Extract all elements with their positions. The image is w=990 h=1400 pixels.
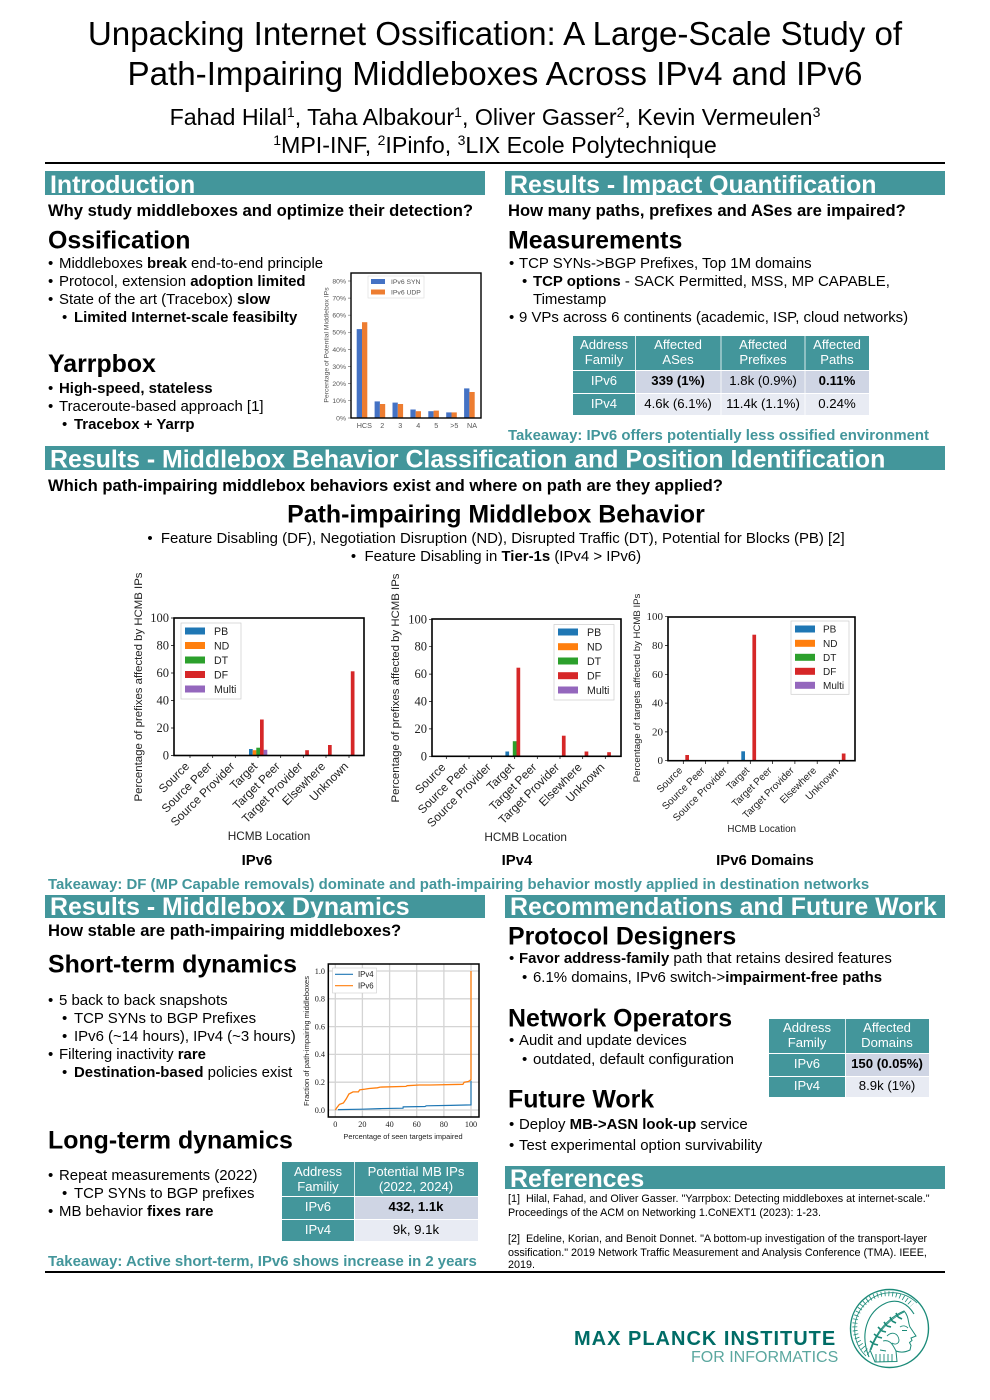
table: impact: IPv6 (591, 373, 617, 388)
bar chart: potential middlebox IPs by hop: NA (467, 421, 477, 430)
chart: IPv6 prefixes by HCMB location: 60 (156, 666, 169, 680)
line chart: fraction of middleboxes vs targets impaired: 100 (465, 1120, 477, 1129)
bullet list: short-term: rare (178, 1046, 206, 1063)
line chart: fraction of middleboxes vs targets impaired (302, 964, 479, 1141)
chart: IPv6 domains by HCMB location: 80 (652, 640, 664, 652)
bullet list: short-term: policies exist (208, 1064, 292, 1081)
title (88, 16, 903, 93)
table: long-term (282, 1162, 478, 1241)
bar chart: potential middlebox IPs by hop: HCS (357, 421, 372, 430)
bar chart: potential middlebox IPs by hop: IPv6 UDP (391, 290, 421, 296)
chart: IPv4 prefixes by HCMB location: Source Provider (424, 760, 494, 830)
bullet list: protocol designers (509, 950, 892, 986)
chart: IPv6 prefixes by HCMB location (133, 572, 364, 843)
bullet list: future work: MB->ASN look-up service (570, 1116, 748, 1133)
logo: Max Planck Institute for Informatics (574, 1290, 928, 1368)
panel: impact quantification (505, 171, 945, 444)
bar chart: potential middlebox IPs by hop: Percentage of Potential Middlebox IPs (324, 287, 330, 403)
chart: IPv6 prefixes by HCMB location: 40 (156, 694, 169, 708)
bullet list: yarrpbox: • (48, 380, 53, 397)
chart: IPv6 prefixes by HCMB location: Unknown (306, 759, 351, 804)
bullet list: yarrpbox: High-speed, stateless (59, 380, 213, 397)
chart: IPv6 domains by HCMB location: 100 (646, 611, 664, 623)
heading: results impact quantification: Results - Impact Quantification (510, 171, 876, 199)
title: Unpacking Internet Ossification: A Large-Scale Study of (88, 16, 903, 53)
table: long-term: Familiy (297, 1179, 339, 1194)
line chart: fraction of middleboxes vs targets impaired: 0.6 (315, 1022, 325, 1031)
bar chart: potential middlebox IPs by hop: 30% (332, 364, 346, 371)
bullet list: ossification (48, 255, 323, 326)
table: operators: IPv4 (794, 1078, 820, 1093)
subheading: network operators: Network Operators (508, 1004, 732, 1032)
icon: Minerva head seal (850, 1290, 928, 1368)
references list: Proceedings of the ACM on Networking 1.CoNEXT1 (2023): 1-23. (508, 1207, 821, 1219)
bullet list: measurements: Timestamp (533, 291, 606, 308)
line chart: fraction of middleboxes vs targets impaired: 60 (413, 1120, 421, 1129)
panel: behavior classification (45, 446, 945, 893)
bullet list: measurements: TCP SYNs->BGP Prefixes, Top 1M domains (519, 255, 812, 272)
line chart: fraction of middleboxes vs targets impaired: Percentage of seen targets impaired (343, 1132, 463, 1141)
authors and affiliations: IPinfo, (385, 132, 458, 158)
table: impact: 11.4k (1.1%) (726, 396, 800, 411)
chart: IPv4 prefixes by HCMB location: HCMB Location (484, 830, 567, 844)
table: long-term: IPv6 (305, 1199, 331, 1214)
chart: IPv6 domains by HCMB location (632, 594, 855, 835)
chart: IPv6 domains by HCMB location: Target Peer (730, 765, 775, 810)
line chart: fraction of middleboxes vs targets impaired: 0.8 (315, 995, 325, 1004)
chart: IPv6 prefixes by HCMB location: 100 (150, 611, 169, 625)
bar chart: potential middlebox IPs by hop: IPv6 SYN (391, 279, 421, 286)
chart: IPv6 domains by HCMB location: 0 (658, 755, 664, 767)
table: long-term: Address (294, 1164, 342, 1179)
bullet list: ossification: Limited Internet-scale feasibilty (74, 309, 298, 326)
bullet list: measurements: • (509, 255, 514, 272)
authors and affiliations: 1 (454, 104, 462, 120)
line chart: fraction of middleboxes vs targets impaired: IPv4 (358, 970, 374, 979)
chart: IPv6 domains by HCMB location: DF (823, 667, 836, 678)
question: how stable: How stable are path-impairing middleboxes? (48, 921, 401, 940)
question: how many paths: How many paths, prefixes and ASes are impaired? (508, 201, 906, 220)
chart: IPv6 domains by HCMB location: Source Provider (671, 765, 730, 824)
bullet list: yarrpbox: • (48, 398, 53, 415)
chart: IPv6 domains by HCMB location: Percentage of targets affected by HCMB IPs (632, 594, 643, 782)
bullet list: protocol designers: impairment-free paths (725, 969, 882, 986)
chart: IPv4 prefixes by HCMB location: Target Peer (486, 760, 539, 813)
bullet list: ossification: Protocol, extension (59, 273, 190, 290)
chart: IPv4 prefixes by HCMB location: 20 (414, 722, 427, 736)
table: long-term: (2022, 2024) (379, 1179, 453, 1194)
chart: IPv6 prefixes by HCMB location: Elsewhere (279, 759, 328, 808)
bullet list: long-term (48, 1167, 257, 1220)
chart: IPv4 prefixes by HCMB location: 0 (421, 749, 427, 763)
line chart: fraction of middleboxes vs targets impaired: 0.4 (315, 1050, 325, 1059)
bullet list: short-term: • (48, 1046, 53, 1063)
table: impact: 0.24% (818, 396, 856, 411)
line chart: fraction of middleboxes vs targets impaired: 0.2 (315, 1078, 325, 1087)
chart: IPv4 prefixes by HCMB location: Source Peer (415, 760, 471, 816)
chart: IPv6 domains by HCMB location: Unknown (804, 765, 841, 803)
bullet list: future work (509, 1116, 763, 1154)
bullet list: protocol designers: 6.1% domains, IPv6 switch-> (533, 969, 725, 986)
bullet list: ossification: adoption limited (190, 273, 306, 290)
chart captions: IPv4 (502, 853, 533, 869)
heading: middlebox dynamics: Results - Middlebox Dynamics (50, 893, 410, 921)
bar chart: potential middlebox IPs by hop: 80% (332, 278, 346, 285)
chart: IPv6 domains by HCMB location: 60 (652, 669, 664, 681)
chart: IPv4 prefixes by HCMB location: Unknown (563, 760, 607, 805)
line chart: fraction of middleboxes vs targets impaired: 40 (386, 1120, 394, 1129)
authors and affiliations: 3 (813, 104, 821, 120)
bullet list: short-term: Destination-based (74, 1064, 203, 1081)
bullet list: measurements (509, 255, 908, 326)
line chart: fraction of middleboxes vs targets impaired: 80 (440, 1120, 448, 1129)
chart captions: IPv6 Domains (716, 853, 814, 869)
chart: IPv4 prefixes by HCMB location: 100 (408, 612, 427, 626)
bullet list: ossification: • (48, 273, 53, 290)
bullet list: short-term: • (62, 1010, 67, 1027)
bar chart: potential middlebox IPs by hop: 50% (332, 330, 346, 337)
chart: IPv4 prefixes by HCMB location: PB (587, 627, 601, 639)
table: operators: 150 (0.05%) (851, 1056, 923, 1071)
subheading: ossification: Ossification (48, 226, 190, 254)
bar chart: potential middlebox IPs by hop: 40% (332, 347, 346, 354)
chart: IPv6 prefixes by HCMB location: PB (214, 626, 228, 638)
bullet list: future work: Deploy (519, 1116, 570, 1133)
bullet list: yarrpbox: • (62, 416, 67, 433)
table: impact (573, 336, 869, 415)
chart: IPv6 prefixes by HCMB location: 20 (156, 721, 169, 735)
authors and affiliations: 2 (378, 132, 386, 148)
chart: IPv6 domains by HCMB location: Multi (823, 681, 844, 692)
bullet list: protocol designers: Favor address-family (519, 950, 670, 967)
bullet list: short-term: • (48, 992, 53, 1009)
heading: recommendations: Recommendations and Future Work (510, 893, 937, 921)
table: impact: Family (585, 352, 624, 367)
subheading: long-term: Long-term dynamics (48, 1126, 293, 1154)
bullet list: ossification: • (48, 255, 53, 272)
logo: Max Planck Institute for Informatics: FOR INFORMATICS (691, 1349, 838, 1366)
bar chart: potential middlebox IPs by hop: >5 (450, 421, 458, 430)
chart: IPv4 prefixes by HCMB location: Source (412, 760, 449, 797)
table: impact: Affected (739, 337, 787, 352)
bullet list: long-term: TCP SYNs to BGP prefixes (74, 1185, 254, 1202)
table: impact: Paths (820, 352, 854, 367)
logo: Max Planck Institute for Informatics: MAX PLANCK INSTITUTE (574, 1328, 836, 1350)
bar chart: potential middlebox IPs by hop: 3 (398, 421, 402, 430)
chart: IPv4 prefixes by HCMB location: DF (587, 671, 602, 683)
subheading: behavior: Path-impairing Middlebox Behavior (287, 500, 705, 528)
chart: IPv4 prefixes by HCMB location: Target Provider (496, 760, 562, 827)
bullet list: behavior (147, 530, 845, 565)
line chart: fraction of middleboxes vs targets impaired: IPv6 (358, 982, 374, 990)
table: impact: 4.6k (6.1%) (644, 396, 712, 411)
chart: IPv6 domains by HCMB location: Elsewhere (778, 765, 819, 806)
line chart: fraction of middleboxes vs targets impaired: 0.0 (315, 1106, 325, 1115)
bullet list: short-term: 5 back to back snapshots (59, 992, 228, 1009)
table: impact: ASes (662, 352, 694, 367)
chart: IPv6 domains by HCMB location: 40 (652, 698, 664, 710)
chart: IPv6 domains by HCMB location: 20 (652, 726, 664, 738)
bullet list: future work: • (509, 1116, 514, 1133)
takeaway: impact: Takeaway: IPv6 offers potentially less ossified environment (508, 427, 929, 444)
chart: IPv4 prefixes by HCMB location: Elsewhere (536, 760, 585, 809)
table: impact: 0.11% (819, 373, 856, 388)
chart: IPv6 prefixes by HCMB location: Source Provider (168, 759, 237, 829)
chart: IPv6 prefixes by HCMB location: Source (156, 759, 192, 796)
line chart: fraction of middleboxes vs targets impaired: Fraction of path-impairing middleboxes (302, 976, 311, 1106)
bullet list: short-term: • (62, 1028, 67, 1045)
table: operators: Family (788, 1035, 827, 1050)
chart: IPv6 prefixes by HCMB location: 0 (163, 748, 169, 762)
bullet list: ossification: • (62, 309, 67, 326)
bullet list: network operators: Audit and update devices (519, 1032, 687, 1049)
chart: IPv6 domains by HCMB location: Source (655, 765, 685, 796)
chart: IPv6 prefixes by HCMB location: Target (227, 759, 261, 792)
bullet list: short-term: Filtering inactivity (59, 1046, 178, 1063)
bullet list: ossification: State of the art (Tracebox) (59, 291, 237, 308)
chart: IPv6 domains by HCMB location: Target (725, 765, 752, 793)
chart: IPv6 domains by HCMB location: PB (823, 624, 837, 636)
panel: middlebox dynamics (45, 893, 485, 1270)
references list (508, 1193, 930, 1271)
takeaway: behavior: Takeaway: DF (MP Capable removals) dominate and path-impairing behavior mostly applied in destination networks (48, 876, 869, 893)
bullet list: short-term: • (62, 1064, 67, 1081)
table: impact: Address (580, 337, 628, 352)
chart: IPv6 prefixes by HCMB location: HCMB Location (228, 829, 310, 843)
bullet list: yarrpbox (48, 380, 264, 433)
chart: IPv4 prefixes by HCMB location: Multi (587, 685, 609, 697)
panel: recommendations and future work (505, 893, 945, 1271)
bullet list: protocol designers: • (509, 950, 514, 967)
bullet list: measurements: • (522, 273, 527, 290)
table: long-term: IPv4 (305, 1222, 331, 1237)
table: operators: 8.9k (1%) (859, 1078, 915, 1093)
chart: IPv4 prefixes by HCMB location: ND (587, 642, 603, 654)
bar chart: potential middlebox IPs by hop: 60% (332, 313, 346, 320)
chart: IPv6 prefixes by HCMB location: DF (214, 670, 229, 682)
bullet list: long-term: • (62, 1185, 67, 1202)
subheading: short-term: Short-term dynamics (48, 950, 297, 978)
bar chart: potential middlebox IPs by hop: 2 (380, 421, 384, 430)
bullet list: behavior: • Feature Disabling in Tier-1s (IPv4 > IPv6) (351, 548, 641, 565)
chart: IPv6 prefixes by HCMB location: Multi (214, 684, 236, 696)
authors and affiliations: MPI-INF, (281, 132, 378, 158)
table: long-term: 9k, 9.1k (393, 1222, 439, 1237)
bullet list: short-term: TCP SYNs to BGP Prefixes (74, 1010, 256, 1027)
chart: IPv4 prefixes by HCMB location: 60 (414, 667, 427, 681)
bullet list: measurements: 9 VPs across 6 continents (academic, ISP, cloud networks) (519, 309, 908, 326)
chart: IPv6 prefixes by HCMB location: Source Peer (159, 759, 215, 815)
chart: IPv4 prefixes by HCMB location: Percentage of prefixes affected by HCMB IPs (390, 573, 402, 802)
bullet list: measurements: • (509, 309, 514, 326)
chart: IPv6 prefixes by HCMB location: Percentage of prefixes affected by HCMB IPs (133, 572, 145, 801)
bullet list: ossification: Middleboxes (59, 255, 147, 272)
bullet list: protocol designers: path that retains desired features (673, 950, 892, 967)
chart: IPv6 domains by HCMB location: Target Provider (741, 765, 797, 821)
heading: behavior classification: Results - Middlebox Behavior Classification and Position Identification (50, 446, 885, 474)
table: operators: Domains (861, 1035, 913, 1050)
bullet list: network operators: • (522, 1051, 527, 1068)
bar chart: potential middlebox IPs by hop (324, 273, 481, 430)
references list: ossification." 2019 Network Traffic Measurement and Analysis Conference (TMA). IEEE, (508, 1247, 927, 1259)
bar chart: potential middlebox IPs by hop: 10% (332, 398, 346, 405)
authors and affiliations: 2 (617, 104, 625, 120)
chart: IPv6 prefixes by HCMB location: Target Provider (239, 759, 305, 826)
title: Path-Impairing Middleboxes Across IPv4 and IPv6 (128, 56, 862, 93)
bullet list: measurements: - SACK Permitted, MSS, MP CAPABLE, (625, 273, 890, 290)
bar chart: potential middlebox IPs by hop: 0% (336, 415, 346, 422)
heading: references: References (510, 1165, 644, 1193)
bullet list: long-term: Repeat measurements (2022) (59, 1167, 257, 1184)
bullet list: behavior: • Feature Disabling (DF), Negotiation Disruption (ND), Disrupted Traffic (DT), Potential for Blocks (PB) [2] (147, 530, 845, 547)
heading: references (505, 1165, 945, 1193)
chart: IPv6 prefixes by HCMB location: 80 (156, 638, 169, 652)
bar chart: potential middlebox IPs by hop: 5 (434, 421, 438, 430)
bullet list: short-term: IPv6 (~14 hours), IPv4 (~3 hours) (74, 1028, 296, 1045)
bullet list: future work: • (509, 1137, 514, 1154)
chart: IPv4 prefixes by HCMB location (390, 573, 621, 844)
authors and affiliations: LIX Ecole Polytechnique (465, 132, 717, 158)
chart: IPv4 prefixes by HCMB location: Target (484, 760, 517, 793)
table: impact: Affected (654, 337, 702, 352)
chart: IPv4 prefixes by HCMB location: 40 (414, 694, 427, 708)
bullet list: long-term: • (48, 1203, 53, 1220)
table: long-term: 432, 1.1k (388, 1199, 444, 1214)
chart: IPv6 prefixes by HCMB location: DT (214, 655, 229, 667)
authors and affiliations (170, 104, 821, 158)
chart: IPv6 prefixes by HCMB location: Target Peer (230, 759, 283, 812)
table: operators: Address (783, 1020, 831, 1035)
references list: [1] Hilal, Fahad, and Oliver Gasser. "Yarrpbox: Detecting middleboxes at internet-scale." (508, 1193, 930, 1205)
question: which behaviors: Which path-impairing middlebox behaviors exist and where on path are they applied? (48, 476, 723, 495)
authors and affiliations: Fahad Hilal (170, 104, 287, 130)
bullet list: network operators: outdated, default configuration (533, 1051, 734, 1068)
bullet list: yarrpbox: Tracebox + Yarrp (74, 416, 195, 433)
chart: IPv4 prefixes by HCMB location: 80 (414, 640, 427, 654)
subheading: future work: Future Work (508, 1086, 654, 1114)
chart: IPv6 domains by HCMB location: ND (823, 639, 837, 650)
chart: IPv6 domains by HCMB location: HCMB Location (727, 824, 796, 835)
references list: 2019. (508, 1259, 535, 1271)
chart: IPv6 prefixes by HCMB location: ND (214, 640, 230, 652)
bar chart: potential middlebox IPs by hop: 4 (416, 421, 420, 430)
authors and affiliations: 3 (458, 132, 466, 148)
bullet list: ossification: • (48, 291, 53, 308)
bullet list: protocol designers: • (522, 969, 527, 986)
table: operators (769, 1019, 929, 1097)
subheading: yarrpbox: Yarrpbox (48, 350, 156, 378)
chart captions: IPv6 (242, 853, 272, 869)
chart: IPv4 prefixes by HCMB location: DT (587, 656, 602, 668)
authors and affiliations: , Kevin Vermeulen (624, 104, 813, 130)
bullet list: long-term: fixes rare (147, 1203, 213, 1220)
heading: introduction (45, 171, 485, 199)
bullet list: future work: Test experimental option survivability (519, 1137, 763, 1154)
subheading: measurements: Measurements (508, 226, 682, 254)
authors and affiliations: 1 (287, 104, 295, 120)
takeaway: dynamics: Takeaway: Active short-term, IPv6 shows increase in 2 years (48, 1253, 477, 1270)
bullet list: long-term: • (48, 1167, 53, 1184)
question: why study middleboxes: Why study middleboxes and optimize their detection? (48, 201, 473, 220)
bar chart: potential middlebox IPs by hop: 20% (332, 381, 346, 388)
bullet list: long-term: MB behavior (59, 1203, 147, 1220)
table: impact: 1.8k (0.9%) (729, 373, 797, 388)
subheading: protocol designers: Protocol Designers (508, 922, 736, 950)
table: impact: IPv4 (591, 396, 617, 411)
line chart: fraction of middleboxes vs targets impaired: 20 (358, 1120, 366, 1129)
table: operators: IPv6 (794, 1056, 820, 1071)
line chart: fraction of middleboxes vs targets impaired: 1.0 (315, 967, 325, 976)
bullet list: network operators (509, 1032, 734, 1068)
heading: introduction: Introduction (50, 171, 195, 199)
bullet list: short-term (48, 992, 296, 1081)
chart: IPv6 domains by HCMB location: Source Peer (660, 765, 708, 812)
authors and affiliations: , Oliver Gasser (462, 104, 617, 130)
bullet list: ossification: slow (237, 291, 271, 308)
table: impact: 339 (1%) (651, 373, 705, 388)
table: long-term: Potential MB IPs (368, 1164, 465, 1179)
line chart: fraction of middleboxes vs targets impaired: 0 (333, 1120, 337, 1129)
authors and affiliations: 1 (273, 132, 281, 148)
bullet list: measurements: TCP options (533, 273, 621, 290)
table: impact: Affected (813, 337, 861, 352)
bullet list: ossification: break end-to-end principle (147, 255, 323, 272)
chart captions (242, 853, 814, 869)
table: impact: Prefixes (739, 352, 787, 367)
bullet list: yarrpbox: Traceroute-based approach [1] (59, 398, 264, 415)
bullet list: network operators: • (509, 1032, 514, 1049)
table: operators: Affected (863, 1020, 911, 1035)
chart: IPv6 domains by HCMB location: DT (823, 653, 836, 664)
references list: [2] Edeline, Korian, and Benoit Donnet. "A bottom-up investigation of the transport-layer (508, 1233, 928, 1245)
panel: introduction (45, 171, 485, 433)
authors and affiliations: , Taha Albakour (295, 104, 454, 130)
bar chart: potential middlebox IPs by hop: 70% (332, 296, 346, 302)
